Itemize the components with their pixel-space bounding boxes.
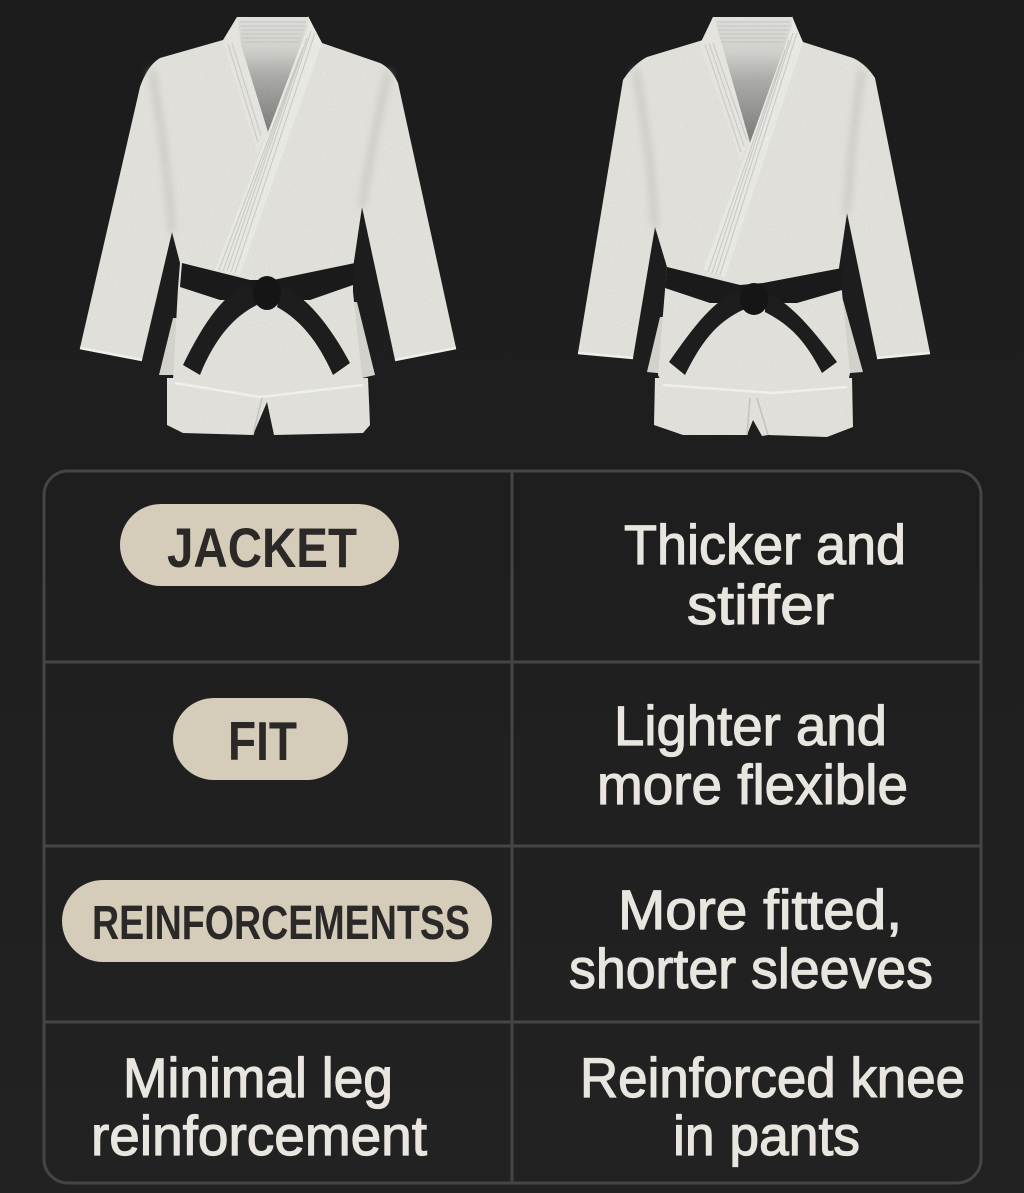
pill: FIT: FIT <box>228 710 297 772</box>
text: Lighter and more flexible: Lighter and <box>614 694 887 757</box>
row 2: fit <box>173 694 908 816</box>
right sleeve seam shading <box>636 70 862 227</box>
text: Lighter and more flexible: more flexible <box>597 753 908 816</box>
text: Thicker and stiffer <box>624 513 906 636</box>
left neck ribbing <box>240 22 306 42</box>
illustration: left gi <box>80 16 456 435</box>
left lapel stitching <box>219 31 315 273</box>
text: Lighter and more flexible <box>597 694 908 816</box>
left pants slit <box>253 398 262 435</box>
right lapel stitching <box>705 33 797 275</box>
right jacket side flaps <box>647 300 863 373</box>
left gi cloth: pants, jacket, collar <box>80 16 456 435</box>
right gi cloth: pants, jacket, collar <box>578 16 930 437</box>
table frame and grid <box>44 471 981 1183</box>
left jacket body and sleeves <box>80 17 456 397</box>
right pants slit <box>747 398 768 435</box>
text: Reinforced knee in pants <box>580 1046 965 1167</box>
right jacket body and sleeves <box>578 17 930 393</box>
pill: REINFORCEMENTSS <box>62 880 492 962</box>
text: Reinforced knee in pants: Reinforced knee <box>580 1046 965 1109</box>
left black belt <box>180 263 355 375</box>
pill: FIT <box>173 698 348 780</box>
left neck opening <box>237 18 308 133</box>
right cuff and hem highlights <box>578 353 930 393</box>
right lapel, wearer's left <box>700 17 750 160</box>
text: Thicker and stiffer: Thicker and <box>624 513 906 576</box>
right lapel, wearer's right <box>703 16 803 277</box>
right pants <box>654 378 853 437</box>
pill: JACKET <box>120 504 399 586</box>
left pants <box>167 378 370 435</box>
row 4: leg reinforcement <box>91 1046 965 1167</box>
text: Minimal leg reinforcement: reinforcement <box>91 1104 427 1167</box>
text: More fitted, shorter sleeves <box>569 878 933 1000</box>
text: Minimal leg reinforcement <box>91 1046 427 1167</box>
row 3: reinforcements <box>62 878 933 1000</box>
pill: REINFORCEMENTSS: REINFORCEMENTSS <box>92 897 470 950</box>
right black belt <box>665 267 842 375</box>
left sleeve seam shading <box>152 70 388 232</box>
text: More fitted, shorter sleeves: shorter sleeves <box>569 937 933 1000</box>
right neck ribbing <box>717 22 790 42</box>
illustration: right gi <box>578 16 930 437</box>
text: Minimal leg reinforcement: Minimal leg <box>123 1046 393 1109</box>
right neck opening <box>715 18 792 143</box>
left lapel, wearer's left <box>223 17 268 152</box>
left jacket side flaps <box>159 302 375 378</box>
text: More fitted, shorter sleeves: More fitted, <box>618 878 902 941</box>
left cuff and hem highlights <box>80 348 456 397</box>
left lapel, wearer's right <box>215 16 322 275</box>
text: Reinforced knee in pants: in pants <box>673 1104 860 1167</box>
comparison table <box>44 471 981 1183</box>
text: Thicker and stiffer: stiffer <box>687 573 834 636</box>
row 1: jacket <box>120 504 906 636</box>
pill: JACKET: JACKET <box>167 516 357 579</box>
